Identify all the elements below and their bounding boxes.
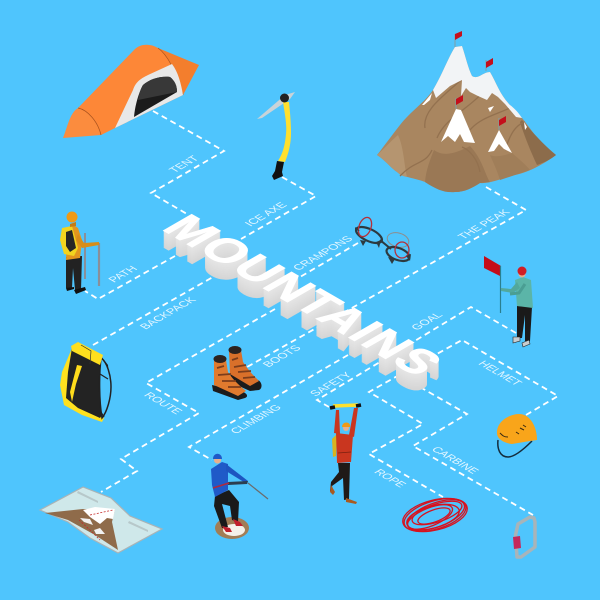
dashed connector lines (85, 111, 558, 515)
icon: backpack (60, 342, 111, 422)
icon: ice axe (257, 92, 295, 180)
label: safety: SAFETY (308, 370, 356, 398)
icon: climber holding ice axe (330, 405, 361, 504)
icon: climber with blue jacket (211, 454, 268, 539)
connector labels (106, 154, 524, 489)
label: ice axe: ICE AXE (243, 201, 290, 228)
label: the peak: THE PEAK (456, 208, 514, 241)
label: backpack: BACKPACK (138, 295, 200, 331)
icon: person with flag (484, 256, 533, 347)
icon: hiker with trekking poles (60, 212, 99, 294)
icon: crampons (354, 216, 411, 264)
icon: carabiner (513, 517, 535, 557)
title: 3D word MOUNTAINS: MOUNTAINS (151, 208, 455, 383)
icon: mountain peak with flags (377, 31, 556, 192)
label: tent: TENT (167, 154, 202, 175)
icon: tent (63, 45, 199, 138)
label: crampons: CRAMPONS (291, 235, 356, 272)
icon: climbing helmet (497, 414, 537, 457)
label: climbing: CLIMBING (228, 403, 285, 436)
label: goal: GOAL (409, 311, 446, 332)
label: helmet: HELMET (475, 359, 524, 388)
label: rope: ROPE (371, 468, 408, 489)
label: boots: BOOTS (261, 344, 304, 369)
label: carbine: CARBINE (428, 445, 481, 476)
label: path: PATH (106, 265, 141, 284)
icon: map (40, 487, 162, 553)
icon: rope coil (399, 492, 471, 538)
label: route: ROUTE (141, 391, 184, 416)
icon: boots (212, 346, 262, 400)
